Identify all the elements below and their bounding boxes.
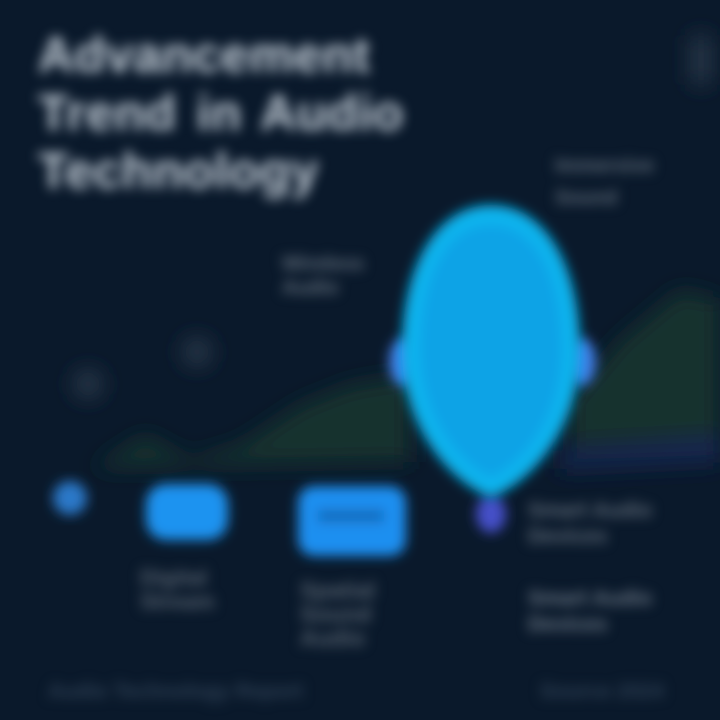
label: right lower one xyxy=(524,498,655,548)
icon: blue rounded box xyxy=(146,484,228,540)
icon: central cyan oval xyxy=(402,205,580,498)
label: under second box: Spatial xyxy=(300,577,375,603)
footer left: Audio Technology Report xyxy=(48,680,303,703)
label: right lower two: Smart Audio xyxy=(528,587,652,610)
label: middle: Wireless xyxy=(282,253,364,275)
title: Technology xyxy=(38,143,319,199)
label: under first box: Stream xyxy=(140,589,215,614)
icon: small blue dot xyxy=(53,481,87,515)
title: Trend in Audio xyxy=(38,85,404,141)
label: upper right xyxy=(552,155,656,209)
label: under first box: Digital xyxy=(140,565,207,590)
label: middle: Audio xyxy=(282,277,339,299)
label: upper right: Immersive xyxy=(555,155,654,177)
area chart: green hills xyxy=(90,290,720,470)
label: middle xyxy=(278,251,367,300)
label: under second box xyxy=(298,577,378,651)
label: right lower one: Devices xyxy=(528,525,607,548)
label: under second box: Audio xyxy=(300,625,365,651)
label: right lower two: Devices xyxy=(528,613,607,636)
label: right lower one: Smart Audio xyxy=(528,499,652,522)
footer right: Source 2024 xyxy=(540,680,664,703)
title xyxy=(32,27,410,207)
icon: wide blue box xyxy=(298,486,406,556)
marker: side dots xyxy=(389,338,596,533)
label: under first box xyxy=(136,565,217,614)
label: under second box: Sound xyxy=(300,601,372,627)
title: Advancement xyxy=(38,27,370,83)
label: right lower two xyxy=(524,586,656,636)
label: upper right: Sound xyxy=(555,187,617,209)
markers: faint dots xyxy=(74,35,710,398)
